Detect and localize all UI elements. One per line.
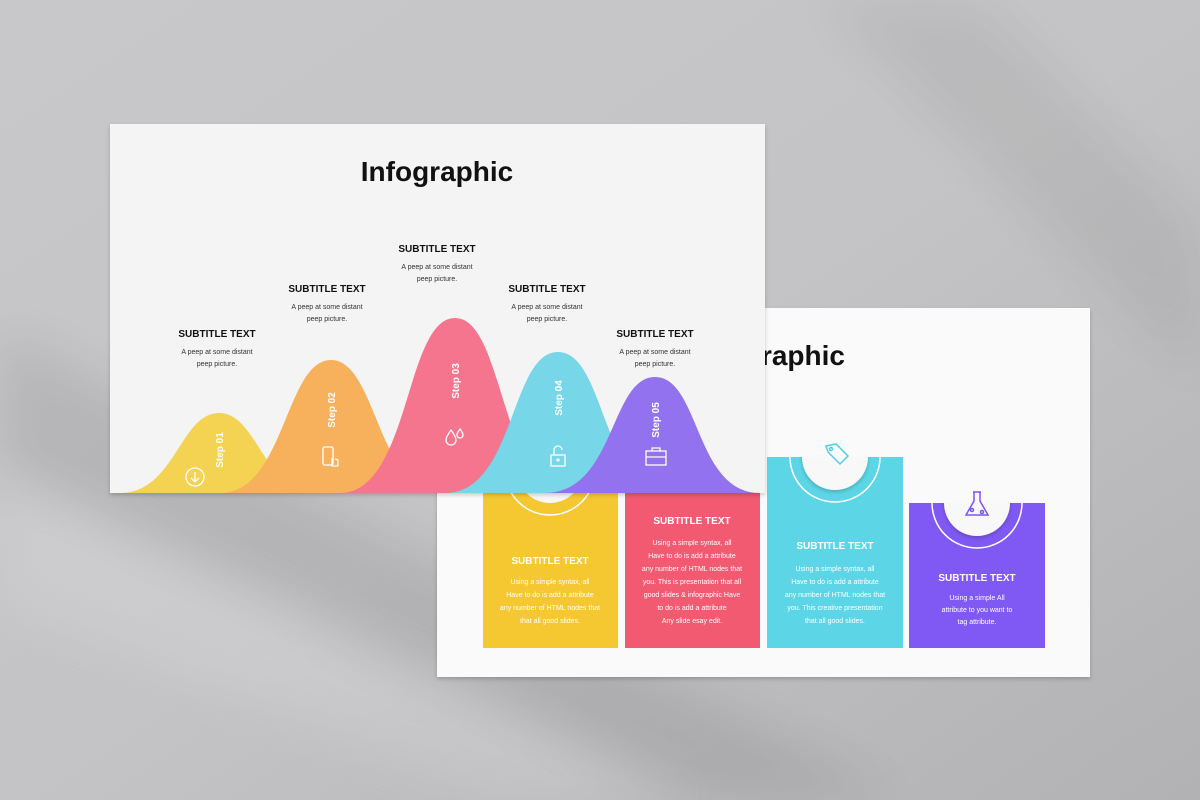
card: red: you. This is presentation that all <box>643 579 742 586</box>
card: red: good slides & infographic Have <box>644 592 740 599</box>
text blocks <box>178 244 694 368</box>
text blocks: peep picture. <box>197 361 237 368</box>
step labels: Step 04 <box>554 380 565 416</box>
card: cyan <box>767 443 903 648</box>
card: red: any number of HTML nodes that <box>642 566 742 573</box>
card: cyan: you. This creative presentation <box>787 605 883 612</box>
text blocks: SUBTITLE TEXT <box>508 284 586 295</box>
text blocks: peep picture. <box>307 316 347 323</box>
card: red: Using a simple syntax, all <box>653 540 732 547</box>
text blocks: A peep at some distant <box>619 349 691 356</box>
text blocks: A peep at some distant <box>511 304 583 311</box>
step labels: Step 05 <box>651 402 662 438</box>
card: red: to do is add a attribute <box>657 605 727 612</box>
card: yellow: Using a simple syntax, all <box>511 579 590 586</box>
card: cyan: Have to do is add a attribute <box>791 579 879 586</box>
card: red <box>625 430 760 648</box>
step labels <box>215 363 662 468</box>
text blocks: peep picture. <box>527 316 567 323</box>
card: cyan: SUBTITLE TEXT <box>796 541 874 552</box>
icon: tag <box>826 444 848 464</box>
step labels: Step 02 <box>327 392 338 428</box>
card: red: Have to do is add a attribute <box>648 553 736 560</box>
card: yellow: Have to do is add a attribute <box>506 592 594 599</box>
text blocks: peep picture. <box>417 276 457 283</box>
card: purple <box>909 491 1045 648</box>
text blocks: A peep at some distant <box>291 304 363 311</box>
text blocks: SUBTITLE TEXT <box>288 284 366 295</box>
card: yellow: that all good slides. <box>520 618 580 625</box>
back slide title: Infographic <box>693 340 845 371</box>
text blocks: A peep at some distant <box>401 264 473 271</box>
card: red: Any slide esay edit. <box>662 618 722 625</box>
text blocks: A peep at some distant <box>181 349 253 356</box>
card: red: SUBTITLE TEXT <box>653 516 731 527</box>
icon: flask <box>966 492 988 515</box>
card: yellow: any number of HTML nodes that <box>500 605 600 612</box>
card: purple: tag attribute. <box>958 619 997 626</box>
card: cyan: that all good slides. <box>805 618 865 625</box>
card: cyan: any number of HTML nodes that <box>785 592 885 599</box>
panel: front slide <box>110 124 765 493</box>
icons <box>186 429 666 486</box>
text blocks: SUBTITLE TEXT <box>178 329 256 340</box>
card: cyan: Using a simple syntax, all <box>796 566 875 573</box>
card: purple: SUBTITLE TEXT <box>938 573 1016 584</box>
chart: bell curves <box>120 318 760 493</box>
card: yellow: SUBTITLE TEXT <box>511 556 589 567</box>
text blocks: SUBTITLE TEXT <box>616 329 694 340</box>
card: purple: attribute to you want to <box>942 607 1013 614</box>
panel: back slide <box>437 308 1090 677</box>
text blocks: peep picture. <box>635 361 675 368</box>
title: Infographic <box>361 156 513 187</box>
card: yellow <box>483 493 618 648</box>
text blocks: SUBTITLE TEXT <box>398 244 476 255</box>
step labels: Step 01 <box>215 432 226 468</box>
card: purple: Using a simple All <box>949 595 1005 602</box>
step labels: Step 03 <box>451 363 462 399</box>
